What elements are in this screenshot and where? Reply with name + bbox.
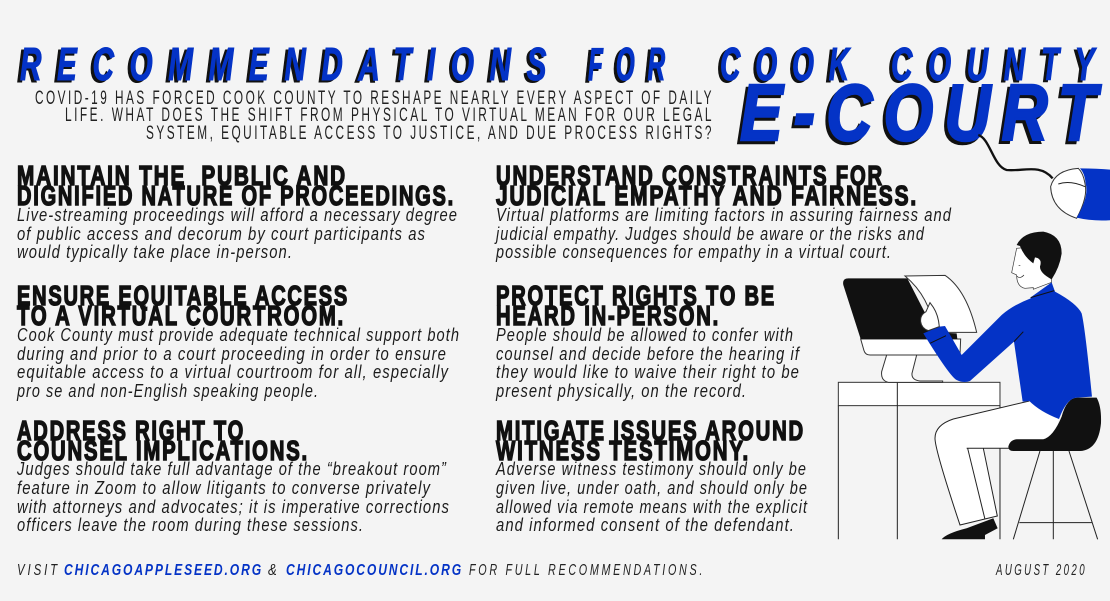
intro paragraph: COVID-19 HAS FORCED COOK COUNTY TO RESHAPE NEARLY EVERY ASPECT OF DAILY — [35, 88, 714, 109]
desk — [838, 382, 1000, 539]
text: virtual platforms — [494, 205, 952, 262]
heading: right to counsel: COUNSEL IMPLICATIONS. — [17, 435, 309, 466]
title: recommendations for Cook County: FOR — [585, 40, 675, 92]
heading: right to counsel — [17, 415, 309, 466]
computer monitor — [843, 278, 961, 382]
text: confer with counsel: present physically, on the record. — [495, 381, 747, 401]
panel: understand constraints — [494, 160, 952, 262]
text: technical support: pro se and non-English speaking people. — [16, 381, 319, 401]
heading: maintain public nature: DIGNIFIED NATURE OF PROCEEDINGS. — [17, 180, 455, 211]
text: live-streaming: would typically take place in-person. — [17, 242, 293, 262]
hand — [921, 303, 939, 331]
text: adverse witness: given live, under oath, and should only be — [496, 478, 808, 498]
shoe — [942, 518, 998, 539]
panel: address right to counsel — [16, 415, 450, 535]
text: technical support: during and prior to a court proceeding in order to ensure — [17, 344, 447, 364]
footer: visit links — [17, 562, 705, 579]
heading: heard in-person: PROTECT RIGHTS TO BE — [496, 280, 776, 311]
trousers — [935, 401, 1058, 525]
title: recommendations for Cook County: RECOMMENDATIONS — [17, 40, 559, 92]
heading: maintain public nature — [17, 160, 455, 211]
text: breakout room: with attorneys and advocates; it is imperative corrections — [17, 497, 450, 517]
text: technical support: equitable access to a virtual courtroom for all, especially — [17, 362, 449, 382]
panel: protect rights — [495, 280, 801, 401]
text: confer with counsel — [495, 325, 801, 401]
text: live-streaming: Live-streaming proceedings will afford a necessary degree — [17, 205, 458, 225]
torso and arm — [923, 282, 1092, 419]
text: adverse witness: Adverse witness testimony should only be — [495, 459, 807, 479]
text: live-streaming — [17, 205, 458, 262]
text: confer with counsel: counsel and decide before the hearing if — [496, 344, 801, 364]
heading: equitable access — [17, 280, 349, 331]
footer: visit links: VISIT — [17, 562, 60, 579]
title: recommendations for Cook County: COOK — [720, 38, 864, 90]
text: breakout room: feature in Zoom to allow litigants to converse privately — [17, 478, 431, 498]
footer: visit links: & — [268, 562, 280, 579]
heading: equitable access: ENSURE EQUITABLE ACCESS — [17, 280, 349, 311]
text: technical support: Cook County must provide adequate technical support both — [17, 325, 460, 345]
heading: maintain public nature: MAINTAIN THE PUBLIC AND — [17, 160, 347, 191]
paper — [905, 275, 977, 332]
heading: equitable access: TO A VIRTUAL COURTROOM. — [17, 300, 345, 331]
text: confer with counsel: they would like to waive their right to be — [496, 362, 800, 382]
panel: ensure equitable access — [16, 280, 460, 401]
panel: mitigate witness issues — [495, 415, 808, 535]
text: virtual platforms: judicial empathy. Judges should be aware or the risks and — [494, 224, 925, 244]
text: breakout room — [16, 459, 450, 535]
heading: witness testimony — [496, 415, 805, 466]
text: breakout room: Judges should take full advantage of the “breakout room” — [16, 459, 447, 479]
stool legs — [1013, 451, 1098, 539]
title: recommendations for Cook County: RECOMMENDATIONS — [20, 38, 562, 90]
heading: judicial empathy: JUDICIAL EMPATHY AND FAIRNESS. — [496, 180, 918, 211]
text: virtual platforms: possible consequences for empathy in a virtual court. — [495, 242, 892, 262]
heading: judicial empathy — [496, 160, 918, 211]
footer: visit links: CHICAGOCOUNCIL.ORG — [286, 562, 463, 579]
text: virtual platforms: Virtual platforms are limiting factors in assuring fairness and — [496, 205, 952, 225]
heading: judicial empathy: UNDERSTAND CONSTRAINTS FOR — [496, 160, 884, 191]
text: adverse witness — [495, 459, 808, 535]
heading: heard in-person: HEARD IN-PERSON. — [496, 300, 720, 331]
intro paragraph: SYSTEM, EQUITABLE ACCESS TO JUSTICE, AND DUE PROCESS RIGHTS? — [146, 123, 714, 144]
text: adverse witness: allowed via remote means with the explicit — [496, 497, 808, 517]
footer: visit links: CHICAGOAPPLESEED.ORG — [64, 562, 263, 579]
title: recommendations for Cook County: FOR — [588, 38, 678, 90]
text: adverse witness: and informed consent of the defendant. — [496, 515, 795, 535]
seat — [1008, 398, 1101, 451]
footer: visit links: FOR FULL RECOMMENDATIONS. — [469, 562, 705, 579]
intro paragraph — [35, 88, 714, 144]
heading: witness testimony: WITNESS TESTIMONY. — [496, 435, 750, 466]
text: breakout room: officers leave the room during these sessions. — [17, 515, 364, 535]
text: technical support — [16, 325, 460, 401]
heading: witness testimony: MITIGATE ISSUES AROUND — [496, 415, 805, 446]
title: recommendations for Cook County: COOK — [717, 40, 861, 92]
hair — [1017, 232, 1062, 279]
text: live-streaming: of public access and decorum by court participants as — [17, 224, 426, 244]
intro paragraph: LIFE. WHAT DOES THE SHIFT FROM PHYSICAL TO VIRTUAL MEAN FOR OUR LEGAL — [65, 105, 714, 126]
illustration: man at computer — [838, 232, 1101, 539]
text: confer with counsel: People should be allowed to confer with — [496, 325, 794, 345]
icon: computer mouse and cable — [978, 135, 1110, 220]
heading: heard in-person — [496, 280, 776, 331]
face — [1012, 247, 1052, 289]
panel: maintain public and dignified proceedings — [17, 160, 458, 262]
heading: right to counsel: ADDRESS RIGHT TO — [17, 415, 245, 446]
